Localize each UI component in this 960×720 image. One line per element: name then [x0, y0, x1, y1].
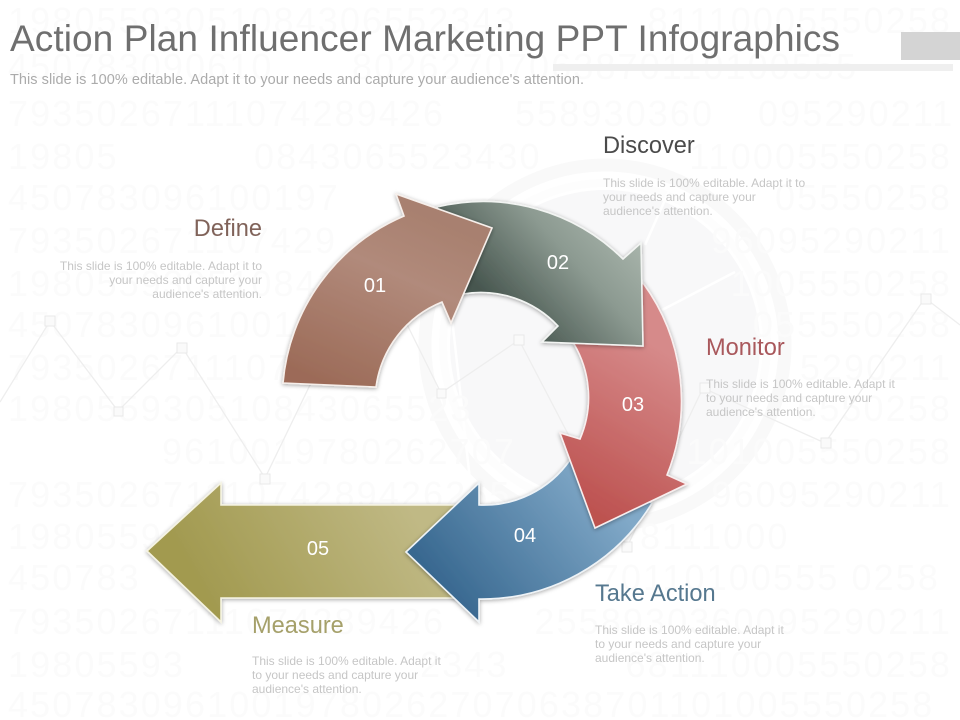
label: Define — [60, 216, 262, 301]
label: Take Action: Take Action — [595, 581, 716, 607]
label: Monitor: Monitor — [706, 335, 785, 361]
arrow 05 Measure — [147, 483, 468, 622]
background digit pattern: 19805593051084306552343 — [8, 0, 517, 41]
background digit pattern: 79350267111074289426 — [8, 93, 445, 134]
label: Monitor: to your needs and capture your — [706, 391, 872, 405]
title: Action Plan Influencer Marketing PPT Infographics — [10, 18, 840, 59]
background target circle watermark — [425, 165, 785, 525]
background digit pattern: 4507830961001978 — [8, 304, 362, 345]
label: Take Action: to your needs and capture your — [595, 637, 761, 651]
background digit pattern: 055550258 — [753, 304, 952, 345]
label: Discover — [603, 133, 805, 218]
label: Monitor — [706, 335, 895, 419]
label: Measure: audience's attention. — [252, 682, 362, 696]
label: Define: your needs and capture your — [109, 273, 262, 287]
background digit pattern: 19805593 — [8, 644, 185, 685]
background digit pattern: 450783090610 — [8, 46, 273, 87]
label: Discover: Discover — [603, 133, 695, 159]
label: Define: Define — [194, 216, 262, 242]
arrow 02 Discover: 02 — [547, 252, 569, 274]
background digit pattern: 19805 — [8, 136, 119, 177]
label: Discover: This slide is 100% editable. Adapt it to — [603, 176, 805, 190]
background digit pattern: 05550258 — [775, 177, 952, 218]
background digit pattern: 7935026711107429 — [8, 347, 357, 388]
arrow 04 Take Action: 04 — [514, 525, 536, 547]
label: Monitor: audience's attention. — [706, 405, 816, 419]
background line chart — [0, 280, 960, 552]
label: Measure — [252, 613, 441, 696]
label: Measure: to your needs and capture your — [252, 668, 418, 682]
background digit pattern: 5550258 — [797, 388, 952, 429]
background digit pattern: 80262707063870110100555 — [352, 46, 858, 87]
background digit pattern: 8111000 — [640, 516, 790, 557]
label: Take Action: audience's attention. — [595, 651, 705, 665]
background digit pattern: 0843065523430 — [254, 136, 542, 177]
background digit pattern: 79350267111074289426 — [8, 601, 445, 642]
top right grey tab — [901, 32, 960, 60]
background digit pattern: 2558930360095290211 — [534, 601, 952, 642]
background digit pattern: 450783096100197 — [8, 177, 340, 218]
background digit pattern: 5290211 — [800, 347, 952, 388]
label: Take Action: This slide is 100% editable. Adapt it — [595, 623, 784, 637]
arrow 01 Define: 01 — [364, 275, 386, 297]
background digit pattern: 81110005550258 — [648, 0, 952, 41]
arrow 05 Measure: 05 — [307, 538, 329, 560]
background digit pattern: 2343 — [420, 644, 508, 685]
background digit pattern: 96095290211 — [711, 220, 952, 261]
label: Discover: your needs and capture your — [603, 190, 756, 204]
label: Monitor: This slide is 100% editable. Adapt it — [706, 377, 895, 391]
top right rule — [553, 64, 953, 71]
background digit pattern: 793502671107429 — [8, 220, 337, 261]
arrow 03 Monitor: 03 — [622, 394, 644, 416]
background digit pattern: 095290211 — [758, 93, 954, 134]
label: Measure: Measure — [252, 613, 344, 639]
background digit pattern: 110005550258 — [689, 136, 952, 177]
label: Take Action — [595, 581, 784, 665]
label: Discover: audience's attention. — [603, 204, 713, 218]
background digit pattern: 558930360 — [515, 93, 714, 134]
arrow 01 Define — [283, 194, 492, 387]
background digit pattern: 198055930510843065523 — [8, 388, 473, 429]
background digit pattern: 70110100555 0258 — [599, 557, 940, 598]
label: Measure: This slide is 100% editable. Adapt it — [252, 654, 441, 668]
background digit pattern: 198055930510843 — [8, 263, 340, 304]
background digit pattern: 450783 — [8, 557, 141, 598]
background digit pattern: 1980559 — [8, 516, 163, 557]
background digit pattern: 96095290211 — [711, 474, 952, 515]
arrow 03 Monitor — [560, 283, 687, 528]
background digit pattern: 1005550258 — [731, 263, 952, 304]
arrow 04 Take Action — [406, 460, 652, 622]
label: Define: audience's attention. — [152, 287, 262, 301]
background digit pattern: 681110005550258 — [626, 644, 952, 685]
label: Define: This slide is 100% editable. Adapt it to — [60, 259, 262, 273]
background digit pattern: 9610019780262707 — [162, 431, 516, 472]
background digit pattern: 79350267111074289426265 — [8, 474, 511, 515]
subtitle: This slide is 100% editable. Adapt it to your needs and capture your audience's attention. — [10, 72, 584, 88]
arrow 02 Discover — [437, 202, 643, 346]
background digit pattern: 101005550258 — [687, 431, 952, 472]
